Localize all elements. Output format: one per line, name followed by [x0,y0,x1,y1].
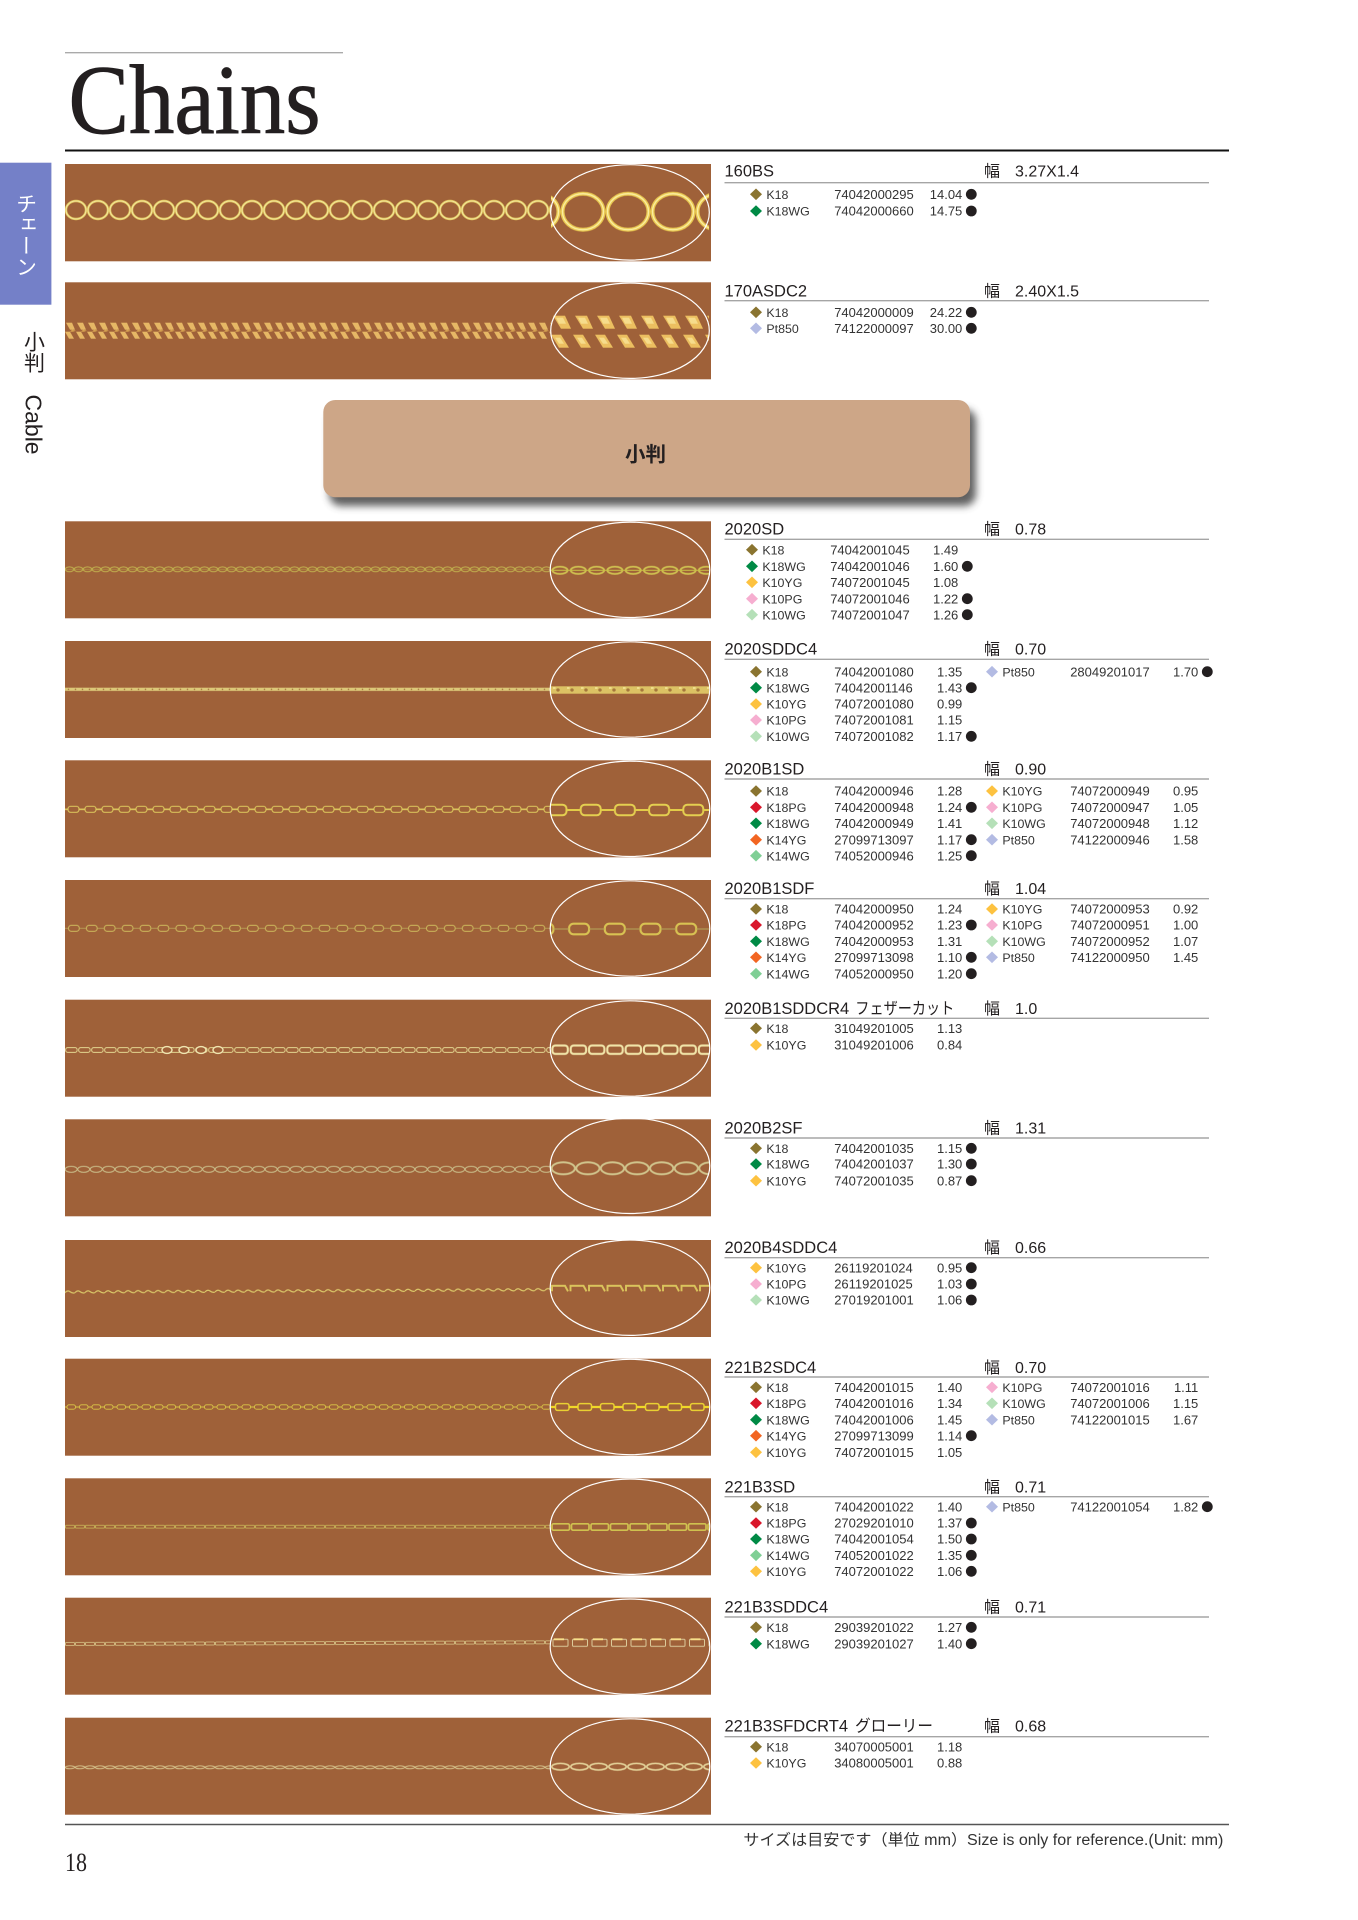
spec rows: K18PG [766,1517,806,1531]
spec rows: K18 [766,1381,789,1395]
spec rows: Pt850 [1002,1500,1035,1514]
spec rows: 74042000953 [834,934,914,949]
spec rows: 74042001006 [834,1412,914,1427]
side tab: chain category [0,163,51,305]
spec rows: K18 [766,1621,789,1635]
spec rows: 74072000951 [1070,918,1150,933]
spec rows [750,902,1198,981]
spec rows: 1.34 [937,1396,962,1411]
spec rows: 26119201024 [834,1260,913,1275]
spec rows: 1.37 [937,1516,962,1531]
spec rows: K18WG [766,1637,810,1651]
width value: 1.04 [1015,881,1046,898]
spec rows: 1.67 [1173,1412,1198,1427]
panel: 2020B1SD [65,760,1209,863]
spec rows: 1.14 [937,1428,962,1443]
spec rows: Pt850 [1002,833,1035,847]
spec rows: K14YG [766,833,806,847]
width value: 幅 [984,1359,1000,1377]
spec rows [750,1141,977,1188]
width value: 幅 [984,1000,1000,1018]
product name: 2020B2SF [724,1119,802,1137]
spec rows: 14.04 [930,187,962,202]
spec rows: 74042000949 [834,816,914,831]
panel: 221B3SD [65,1478,1213,1579]
spec rows: 0.84 [937,1038,962,1053]
spec rows: K10YG [766,1261,806,1275]
spec rows: 1.10 [937,950,962,965]
spec rows: 74072001016 [1070,1380,1150,1395]
spec rows: 74042001022 [834,1499,914,1514]
spec rows: 1.58 [1173,832,1198,847]
spec rows: 1.26 [933,607,958,622]
product name: 170ASDC2 [724,282,807,300]
width value: 幅 [984,1239,1000,1257]
spec rows: K10YG [1002,903,1042,917]
panel: 221B2SDC4 [65,1359,1209,1460]
spec rows: K14WG [766,967,810,981]
width value: 0.90 [1015,761,1046,778]
spec rows: 74072001080 [834,697,914,712]
product name: 2020SD [724,520,784,538]
spec rows: 14.75 [930,204,962,219]
spec rows: 24.22 [930,305,962,320]
panel: 160BS [65,163,1209,261]
spec rows: K10YG [766,1565,806,1579]
panel: 2020B4SDDC4 [65,1239,1209,1337]
spec rows: 1.06 [937,1293,962,1308]
spec rows: 74042001035 [834,1141,914,1156]
spec rows: K18PG [766,919,806,933]
spec rows: K10PG [1002,1381,1042,1395]
spec rows: K18WG [766,681,810,695]
width value: 0.71 [1015,1599,1046,1616]
spec rows [750,1499,1213,1579]
spec rows: 74042001054 [834,1532,914,1547]
width value [984,760,1046,778]
spec rows: K18WG [766,1413,810,1427]
spec rows: 1.23 [937,918,962,933]
spec rows: 1.07 [1173,934,1198,949]
spec rows: 30.00 [930,321,962,336]
spec rows: 74072001047 [830,607,910,622]
product name: 2020B1SDDCR4 [724,1000,849,1018]
product name: 221B3SD [724,1479,795,1497]
chain photo 221B3SDDC4 [65,1598,711,1695]
spec rows: K10YG [766,1757,806,1771]
spec rows: 1.43 [937,680,962,695]
spec rows [750,1620,977,1651]
spec rows: K10PG [766,714,806,728]
spec rows: K18 [766,785,789,799]
panel: 2020SD [65,520,1209,622]
chain photo 2020B1SD [65,760,711,857]
spec rows: 74052001022 [834,1548,914,1563]
spec rows: 1.28 [937,784,962,799]
spec rows: 27099713097 [834,832,914,847]
spec rows [746,542,973,622]
spec rows: 28049201017 [1070,664,1150,679]
chain photo 221B2SDC4 [65,1359,711,1456]
spec rows: Pt850 [766,322,799,336]
chain photo 170ASDC2 [65,282,711,379]
product name: 2020B1SD [724,760,804,778]
spec rows [750,1260,977,1308]
panel: 2020B1SDDCR4 [65,1000,1209,1097]
page number: 18 [65,1848,87,1877]
spec rows [750,1380,1198,1460]
spec rows: K18 [766,188,789,202]
width value: 幅 [984,760,1000,778]
width value [984,641,1046,659]
spec rows: K14WG [766,1549,810,1563]
width value: 幅 [984,520,1000,538]
spec rows: 1.17 [937,832,962,847]
chain photo 221B3SFDCRT4 [65,1718,711,1815]
spec rows: K18 [766,1142,789,1156]
spec rows: 1.30 [937,1157,962,1172]
spec rows: 27029201010 [834,1516,914,1531]
spec rows: 74072001022 [834,1564,914,1579]
spec rows: 1.20 [937,966,962,981]
spec rows: 74072000953 [1070,902,1150,917]
spec rows: 1.15 [937,1141,962,1156]
tab label: チェーン [14,193,36,277]
panel: 2020SDDC4 [65,641,1213,744]
spec rows: 0.87 [937,1173,962,1188]
spec rows: Pt850 [1002,951,1035,965]
chain photo 2020SD [65,521,711,618]
width value [984,880,1046,898]
spec rows: 1.13 [937,1021,962,1036]
spec rows: 1.00 [1173,918,1198,933]
width value: 1.0 [1015,1001,1037,1018]
chain photo 2020B1SDF [65,880,711,977]
panel: 170ASDC2 [65,282,1209,379]
spec rows: K10WG [1002,817,1046,831]
spec rows: 74072001045 [830,575,910,590]
spec rows: 1.15 [1173,1396,1198,1411]
product name: 160BS [724,163,774,181]
product name: 2020SDDC4 [724,641,817,659]
spec rows: 1.03 [937,1277,962,1292]
spec rows: K18WG [762,560,806,574]
spec rows [750,664,1213,744]
panel: 2020B1SDF [65,880,1209,981]
width value: 幅 [984,880,1000,898]
spec rows: K10WG [766,1294,810,1308]
spec rows: 74042001015 [834,1380,914,1395]
spec rows: 74122001054 [1070,1499,1150,1514]
spec rows: 1.41 [937,816,962,831]
panel: 221B3SFDCRT4 [65,1716,1209,1815]
spec rows [750,784,1198,863]
spec rows: 74042000009 [834,305,914,320]
spec rows: 74072000952 [1070,934,1150,949]
spec rows: 0.95 [937,1260,962,1275]
spec rows: 74072000949 [1070,784,1150,799]
spec rows: 1.27 [937,1620,962,1635]
width value: 0.68 [1015,1718,1046,1735]
width value [984,1479,1046,1497]
width value: 幅 [984,1479,1000,1497]
width value: 幅 [984,1717,1000,1735]
section banner [323,400,976,506]
spec rows: K10WG [1002,1397,1046,1411]
spec rows: 1.60 [933,559,958,574]
banner label: 小判 [625,444,666,466]
width value: 0.78 [1015,521,1046,538]
width value: 幅 [984,1598,1000,1616]
spec rows: 1.40 [937,1636,962,1651]
width value [984,1598,1046,1616]
spec rows: 0.99 [937,697,962,712]
spec rows [750,305,977,336]
spec rows: 1.06 [937,1564,962,1579]
spec rows: K18WG [766,1158,810,1172]
spec rows: Pt850 [1002,1413,1035,1427]
spec rows: 74072001035 [834,1173,914,1188]
spec rows: 1.35 [937,1548,962,1563]
width value: 0.70 [1015,1360,1046,1377]
width value: 幅 [984,282,1000,300]
width value: 幅 [984,1119,1000,1137]
spec rows: 74042000295 [834,187,914,202]
spec rows: K18 [766,306,789,320]
spec rows: Pt850 [1002,665,1035,679]
chain photo 2020B1SDDCR4 [65,1000,711,1097]
width value [984,1717,1046,1735]
chain photo 221B3SD [65,1478,711,1575]
spec rows: K18 [766,665,789,679]
spec rows: K10YG [762,576,802,590]
spec rows: 74042000660 [834,204,914,219]
spec rows: 1.22 [933,591,958,606]
width value: 0.71 [1015,1480,1046,1497]
spec rows: 1.40 [937,1380,962,1395]
spec rows: 1.05 [1173,800,1198,815]
product name: グローリー [855,1716,933,1735]
width value [984,1119,1046,1137]
spec rows: 74042001046 [830,559,910,574]
panel: 221B3SDDC4 [65,1598,1209,1695]
product name: フェザーカット [855,1000,954,1018]
width value [984,282,1079,300]
spec rows: 1.70 [1173,664,1198,679]
width value [984,1239,1046,1257]
spec rows: K10WG [766,730,810,744]
spec rows: K10YG [766,1039,806,1053]
width value: 0.66 [1015,1240,1046,1257]
spec rows: 74072001046 [830,591,910,606]
width value [984,163,1079,181]
spec rows: 1.17 [937,729,962,744]
spec rows: K18 [766,1022,789,1036]
width value [984,1359,1046,1377]
spec rows: K10YG [766,698,806,712]
spec rows: 74122000946 [1070,832,1150,847]
width value [984,1000,1037,1018]
product name: 221B2SDC4 [724,1359,816,1377]
product name [724,1000,954,1018]
width value: 0.70 [1015,642,1046,659]
spec rows [750,1739,962,1771]
title: Chains [68,46,320,155]
spec rows: 1.50 [937,1532,962,1547]
spec rows: 74122000950 [1070,950,1150,965]
product name: 2020B1SDF [724,880,814,898]
spec rows: K10PG [1002,801,1042,815]
spec rows: 0.88 [937,1756,962,1771]
chain photo 2020B2SF [65,1118,711,1216]
spec rows: 74072000947 [1070,800,1150,815]
spec rows: 1.35 [937,664,962,679]
spec rows: 0.95 [1173,784,1198,799]
spec rows: 27099713099 [834,1428,914,1443]
spec rows: K10WG [762,608,806,622]
spec rows: 74122001015 [1070,1412,1150,1427]
spec rows: 74122000097 [834,321,914,336]
spec rows: 31049201006 [834,1038,914,1053]
spec rows: K10PG [1002,919,1042,933]
width value: 幅 [984,163,1000,181]
spec rows: 34080005001 [834,1756,914,1771]
spec rows: 1.31 [937,934,962,949]
spec rows: 26119201025 [834,1277,913,1292]
spec rows: K18 [766,903,789,917]
spec rows: K18 [766,1500,789,1514]
spec rows: 1.25 [937,848,962,863]
spec rows: 1.82 [1173,1499,1198,1514]
spec rows: 31049201005 [834,1021,914,1036]
spec rows: 74042000952 [834,918,914,933]
spec rows: 74072000948 [1070,816,1150,831]
side label: koban: 小判 [22,331,45,373]
spec rows: 1.49 [933,542,958,557]
width value: 2.40X1.5 [1015,283,1079,300]
spec rows [750,1021,962,1053]
spec rows: 1.40 [937,1499,962,1514]
spec rows: 74052000946 [834,848,914,863]
chain photo 2020SDDC4 [65,641,711,738]
product name: 221B3SDDC4 [724,1598,828,1616]
spec rows: 74042000946 [834,784,914,799]
width value [984,520,1046,538]
spec rows: K18PG [766,801,806,815]
spec rows: K10YG [1002,785,1042,799]
spec rows: 1.11 [1174,1380,1198,1395]
spec rows: K18WG [766,935,810,949]
spec rows: 74042001146 [834,680,913,695]
spec rows [750,187,977,219]
chain photo 2020B4SDDC4 [65,1240,711,1337]
spec rows: K18WG [766,817,810,831]
spec rows: 74072001015 [834,1445,914,1460]
width value: 幅 [984,641,1000,659]
spec rows: 1.08 [933,575,958,590]
spec rows: 1.15 [937,713,962,728]
spec rows: 1.12 [1173,816,1198,831]
spec rows: 74072001006 [1070,1396,1150,1411]
spec rows: 74072001082 [834,729,914,744]
spec rows: K18 [766,1740,789,1754]
size note: サイズは目安です（単位 mm）Size is only for reference.(Unit: mm) [743,1831,1223,1849]
spec rows: 74042000948 [834,800,914,815]
spec rows: K10YG [766,1174,806,1188]
spec rows: K18WG [766,205,810,219]
spec rows: 74042001016 [834,1396,914,1411]
width value: 3.27X1.4 [1015,164,1079,181]
spec rows: K10PG [766,1278,806,1292]
panel: 2020B2SF [65,1118,1209,1216]
spec rows: 74072001081 [834,713,914,728]
spec rows: 74052000950 [834,966,914,981]
chain photo 160BS [65,164,711,261]
spec rows: K10YG [766,1446,806,1460]
product name [724,1716,933,1735]
spec rows: K14WG [766,849,810,863]
spec rows: 27019201001 [834,1293,914,1308]
spec rows: K18 [762,543,785,557]
spec rows: 74042001037 [834,1157,914,1172]
spec rows: K14YG [766,1429,806,1443]
spec rows: 1.24 [937,800,962,815]
spec rows: K18PG [766,1397,806,1411]
product name: 221B3SFDCRT4 [724,1717,848,1735]
spec rows: K10WG [1002,935,1046,949]
side label: cable: Cable [20,394,46,455]
spec rows: K14YG [766,951,806,965]
spec rows: 1.45 [1173,950,1198,965]
width value: 1.31 [1015,1120,1046,1137]
spec rows: 27099713098 [834,950,914,965]
spec rows: 1.45 [937,1412,962,1427]
spec rows: 29039201022 [834,1620,914,1635]
product name: 2020B4SDDC4 [724,1239,837,1257]
spec rows: 1.05 [937,1445,962,1460]
spec rows: K18WG [766,1533,810,1547]
spec rows: 1.18 [937,1739,962,1754]
spec rows: K10PG [762,592,802,606]
spec rows: 74042000950 [834,902,914,917]
spec rows: 74042001045 [830,542,910,557]
spec rows: 1.24 [937,902,962,917]
spec rows: 0.92 [1173,902,1198,917]
spec rows: 34070005001 [834,1739,914,1754]
spec rows: 74042001080 [834,664,914,679]
spec rows: 29039201027 [834,1636,914,1651]
